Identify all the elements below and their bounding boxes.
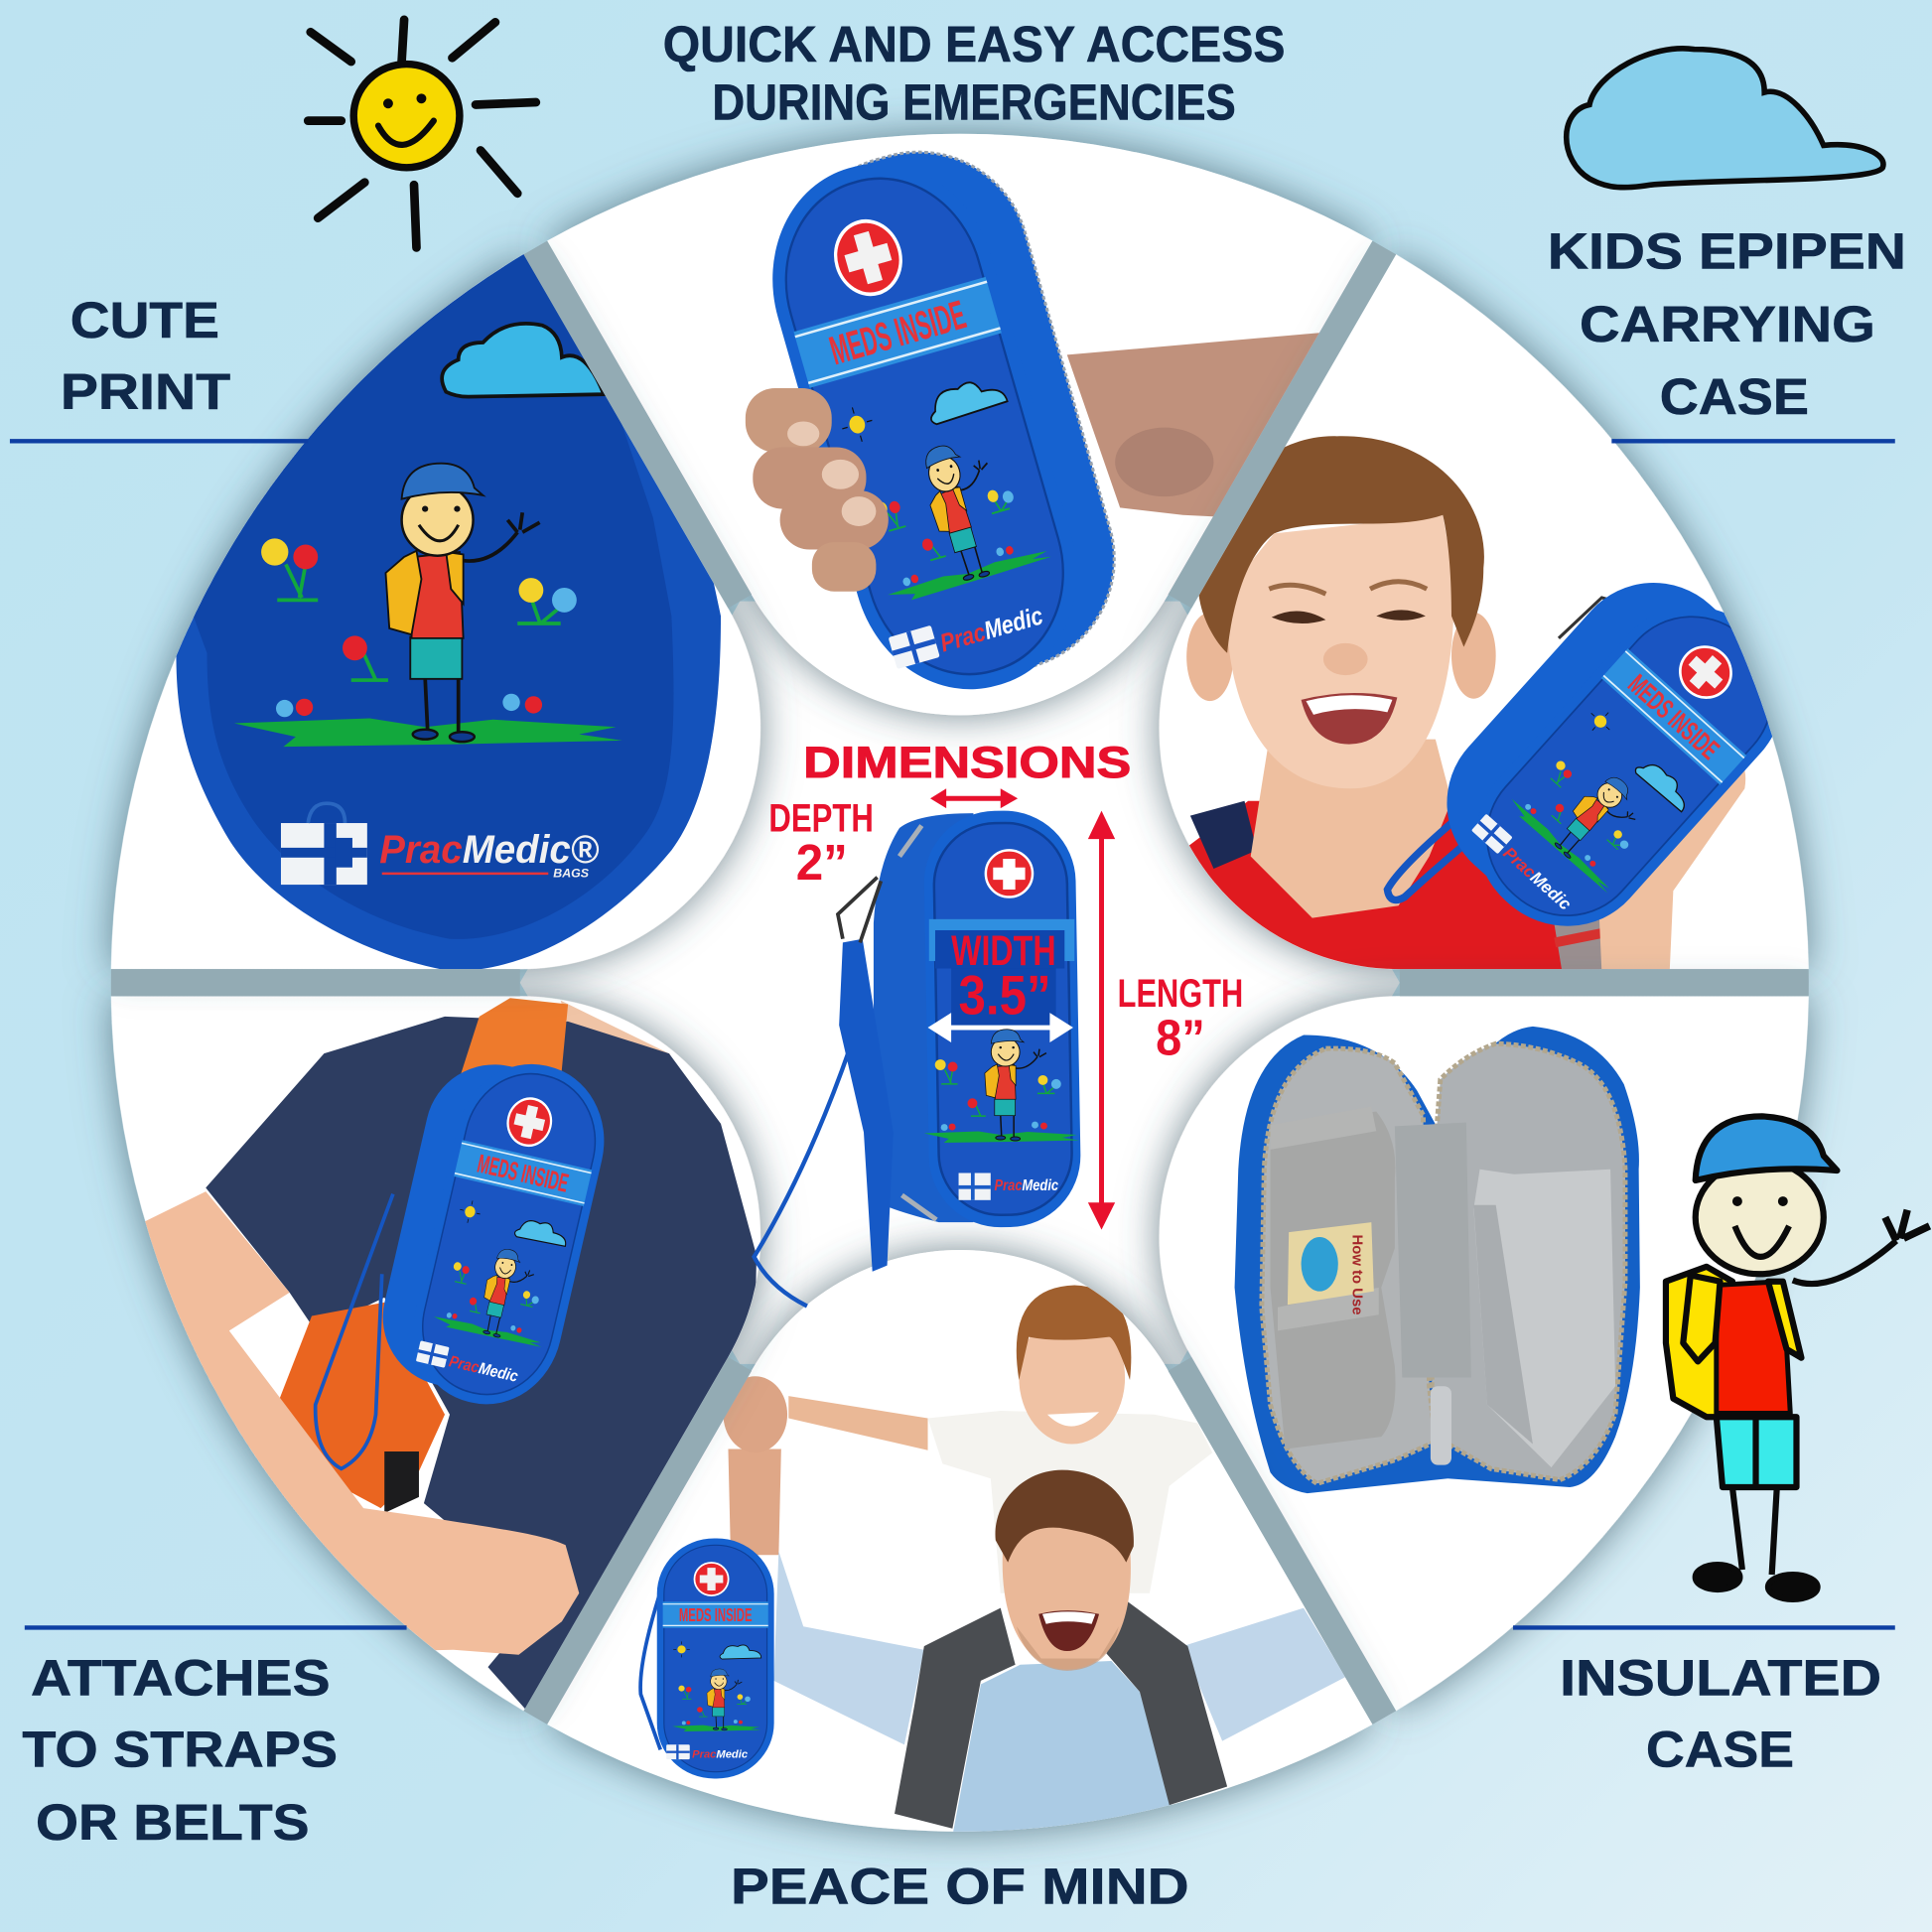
case: info card <box>1288 1222 1374 1315</box>
panel: kids epipen case <box>1128 238 1835 995</box>
bag: band <box>929 919 1074 961</box>
bag: shoulder: MEDS INSIDE <box>475 1150 571 1198</box>
photo: ears <box>1186 613 1496 701</box>
heading: kids epipen carrying case: KIDS EPIPEN <box>1548 223 1906 280</box>
heading: quick and easy access: QUICK AND EASY ACCESS <box>663 16 1285 72</box>
heading: insulated case: CASE <box>1646 1722 1794 1778</box>
print: cloud <box>442 324 604 397</box>
photo: man's shirt <box>952 1661 1176 1836</box>
strap: wrist <box>755 1047 850 1307</box>
heading: attaches to straps or belts: ATTACHES <box>31 1650 331 1707</box>
arrow: length <box>1088 811 1115 1230</box>
bag: printed scene <box>924 1030 1079 1143</box>
heading: attaches to straps or belts: OR BELTS <box>36 1794 310 1851</box>
bag: held by boy: MEDS INSIDE <box>1622 668 1725 765</box>
panel: quick access <box>547 126 1372 716</box>
heading: peace of mind: PEACE OF MIND <box>731 1858 1189 1914</box>
case: mesh pocket <box>1271 1111 1396 1449</box>
bag: held up <box>640 1538 774 1779</box>
heading: insulated case <box>1560 1650 1881 1778</box>
bag: held up: MEDS INSIDE <box>679 1604 753 1625</box>
heading: insulated case: INSULATED <box>1560 1650 1881 1707</box>
photo: child's head <box>1017 1285 1131 1445</box>
heading: cute print <box>61 292 230 420</box>
case: info card: How to Use <box>1349 1235 1365 1315</box>
photo: orange pack <box>277 1303 445 1508</box>
bag: logo: PracMedic <box>995 1176 1058 1194</box>
photo: open case <box>1235 1027 1640 1493</box>
heading: cute print: CUTE <box>70 292 219 348</box>
bag: front <box>923 809 1082 1228</box>
case: mesh straps <box>1271 1106 1379 1330</box>
heading: cute print: PRINT <box>61 363 230 420</box>
photo: left arm and hands <box>724 1376 787 1555</box>
heading: kids epipen carrying case <box>1548 223 1906 425</box>
strap: body <box>839 939 894 1272</box>
bag: red cross <box>986 850 1033 897</box>
bag: held by boy: PracMedic <box>1499 843 1576 914</box>
bag: held by boy <box>1387 548 1818 961</box>
logo: PracMedic: PracMedic® <box>379 828 600 872</box>
bag: shoulder <box>316 1049 620 1468</box>
case: zip pull <box>1431 1386 1451 1465</box>
bag: logo <box>959 1173 1058 1200</box>
bag: close-up <box>123 185 721 971</box>
width label block: WIDTH <box>951 927 1056 974</box>
wheel base <box>520 602 1400 1364</box>
bag: side <box>874 813 973 1222</box>
photo: orange strap <box>459 998 568 1082</box>
panel: cute print <box>18 185 934 1206</box>
photo: navy shirt <box>206 1017 757 1713</box>
photo: boy face <box>1198 436 1484 788</box>
logo: PracMedic <box>281 803 600 885</box>
heading: kids epipen carrying case: CASE <box>1660 368 1809 425</box>
case: centre panel <box>1395 1123 1471 1378</box>
panel: insulated case <box>985 759 1901 1764</box>
label: depth: DEPTH <box>768 797 874 841</box>
panel: peace of mind <box>547 1250 1372 1836</box>
photo: hand <box>746 388 889 592</box>
icon: stick boy <box>1666 1116 1930 1599</box>
bag: top: MEDS INSIDE <box>825 292 971 374</box>
icon: sun <box>308 20 536 247</box>
arrow: width <box>928 1013 1073 1042</box>
heading: dimensions: DIMENSIONS <box>803 739 1131 787</box>
bag: top: PracMedic <box>937 602 1046 658</box>
label: length value: 8” <box>1156 1009 1205 1065</box>
photo: child's legs on shoulders <box>895 1600 1227 1829</box>
logo: PracMedic: BAGS <box>553 867 590 881</box>
photo: arm <box>1067 333 1320 517</box>
photo: child's shirt <box>928 1411 1212 1593</box>
heading: quick and easy access <box>663 16 1285 130</box>
heading: attaches to straps or belts: TO STRAPS <box>22 1722 338 1778</box>
label: length: LENGTH <box>1118 972 1243 1016</box>
case: right pockets <box>1473 1170 1615 1467</box>
width label block: 3.5” <box>959 963 1051 1026</box>
arrow: depth <box>930 788 1018 808</box>
bag: top <box>772 151 1116 689</box>
photo: boy shirt <box>1165 801 1608 973</box>
heading: quick and easy access: DURING EMERGENCIES <box>712 73 1236 130</box>
panel: attaches to straps <box>18 759 934 1764</box>
heading: kids epipen carrying case: CARRYING <box>1580 296 1875 352</box>
icon: cloud <box>1567 49 1883 188</box>
heading: attaches to straps or belts <box>22 1650 338 1851</box>
photo: neck <box>561 1001 671 1054</box>
print: boy and flowers <box>234 464 622 747</box>
width label block <box>935 927 1064 1028</box>
photo: arm and hand <box>123 1191 579 1655</box>
panel: dimensions <box>755 739 1243 1307</box>
photo: pack webbing <box>384 1451 419 1513</box>
photo: hand <box>1599 770 1745 969</box>
label: depth value: 2” <box>796 834 848 891</box>
photo: left sleeve <box>773 1552 924 1744</box>
photo: child's arm <box>788 1396 928 1450</box>
photo: right sleeve <box>1182 1608 1345 1741</box>
photo: man's head <box>995 1470 1134 1671</box>
bag: zip and carabiner <box>838 826 936 1220</box>
bag: shoulder: PracMedic <box>447 1353 520 1386</box>
bag: held up: PracMedic <box>692 1748 749 1760</box>
photo: neck and chest <box>1251 740 1451 918</box>
